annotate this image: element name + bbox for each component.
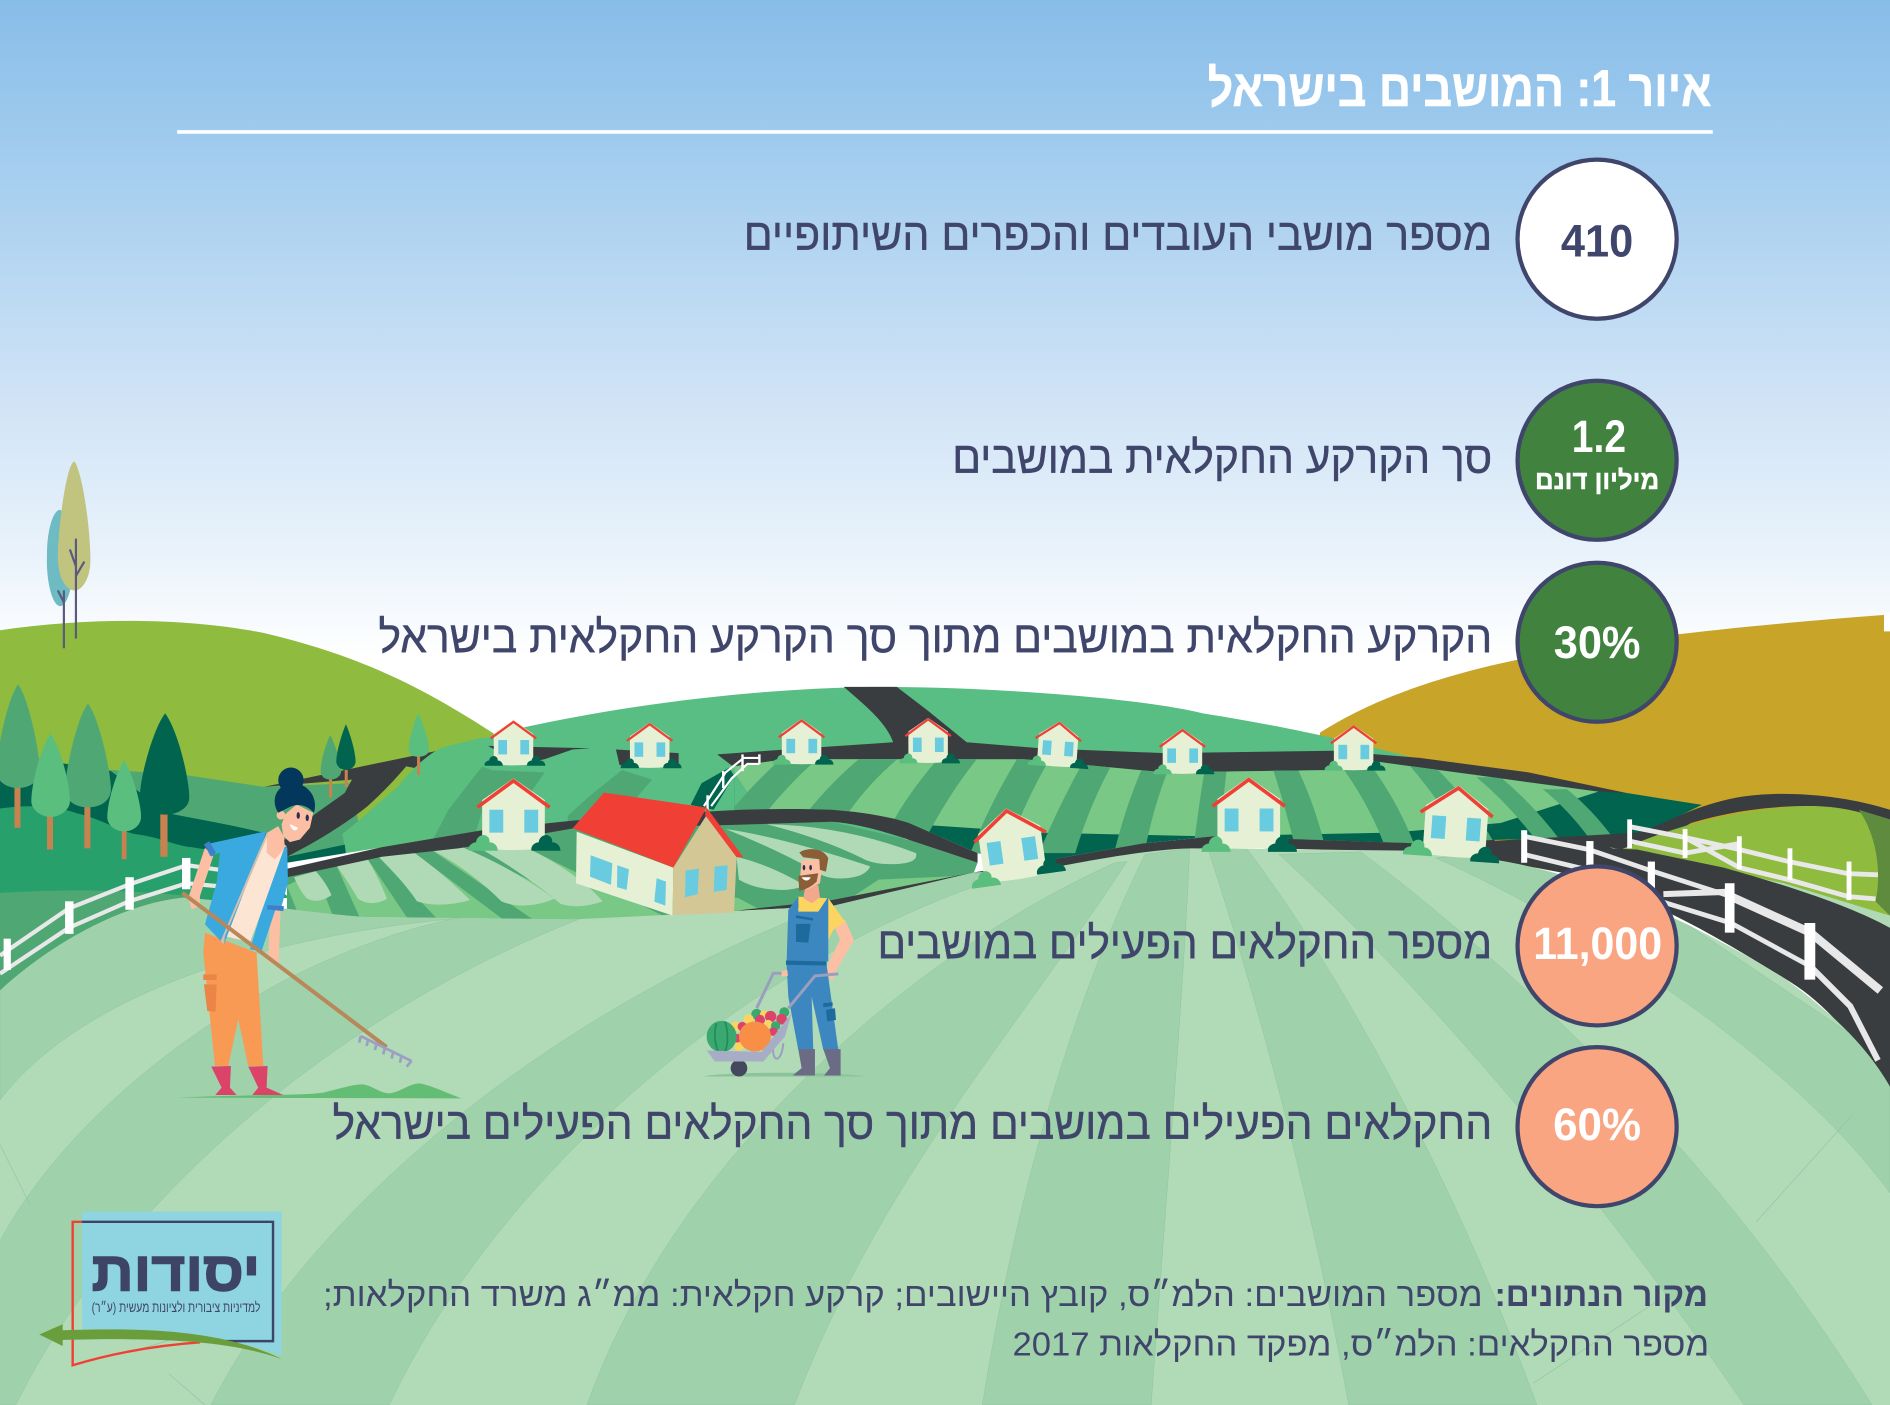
man with wheelbarrow (703, 849, 865, 1076)
logo: Yesodot: יסודות (92, 1241, 260, 1303)
stat row: 30% (378, 563, 1677, 722)
right ribbon road (1490, 794, 1890, 859)
houses (469, 718, 1504, 916)
data source note (323, 1276, 1709, 1364)
stat row: 410 (744, 160, 1677, 319)
right road (1490, 843, 1890, 1103)
stat row: 11,000: מספר החקלאים הפעילים במושבים (878, 919, 1492, 968)
logo: Yesodot (39, 1212, 282, 1365)
lower-left striped field (286, 822, 978, 920)
wheelbarrow (707, 973, 838, 1076)
left side of centre hill (342, 737, 482, 853)
ground shadow (703, 1073, 865, 1076)
upper road with branch (488, 687, 1626, 795)
data source note: מקור הנתונים: (1495, 1276, 1708, 1314)
large farmhouse (573, 793, 743, 916)
light strip below right hill (1609, 847, 1890, 930)
data source note: מספר המושבים: הלמ״ס, קובץ היישובים; קרקע חקלאית: ממ״ג משרד החקלאות; (323, 1276, 1483, 1314)
row of trees (0, 684, 429, 859)
stat row: 30%: הקרקע החקלאית במושבים מתוך סך הקרקע החקלאית בישראל (378, 613, 1492, 662)
stat row: 30%: 30% (1554, 617, 1640, 668)
house row back (485, 718, 1386, 774)
stat row: 1.2 million dunam: 1.2 (1572, 411, 1626, 462)
stat row: 60% (333, 1047, 1677, 1206)
title text: איור 1: המושבים בישראל (1208, 59, 1712, 117)
grass mound (178, 1083, 462, 1098)
far-left road (264, 749, 444, 857)
stat row: 60%: החקלאים הפעילים במושבים מתוך סך החקלאים הפעילים בישראל (333, 1100, 1492, 1149)
centre hill (444, 687, 1431, 856)
far-left hills (0, 753, 362, 1000)
middle striped field (734, 759, 1702, 860)
lower road (733, 836, 1495, 911)
landscape illustration (0, 462, 1890, 1405)
middle road (287, 809, 978, 877)
stat row: 1.2 million dunam: מיליון דונם (1535, 465, 1659, 495)
right far fence (1627, 819, 1878, 900)
right near fence (1521, 830, 1880, 1060)
house row front (469, 777, 1504, 889)
data source note: מספר החקלאים: הלמ״ס, מפקד החקלאות 2017 (1012, 1326, 1709, 1364)
stat row: 60%: 60% (1553, 1099, 1641, 1150)
right edge sliver (1884, 612, 1890, 631)
small centre fence (704, 754, 759, 810)
mustard hill (1320, 615, 1890, 868)
stat row: 11,000 (878, 866, 1677, 1025)
stat row: 410: 410 (1561, 216, 1633, 267)
dark patch under road (287, 845, 346, 863)
right hill edge (1859, 810, 1890, 916)
stat row: 1.2 million dunam (952, 381, 1677, 540)
woman with rake (178, 767, 462, 1098)
patch behind small fence (691, 768, 734, 810)
left fence (0, 858, 229, 974)
olive left hill (0, 621, 506, 843)
stat row: 11,000: 11,000 (1533, 918, 1662, 969)
right olive hill (1621, 806, 1890, 916)
stat row: 1.2 million dunam: סך הקרקע החקלאית במושבים (952, 433, 1492, 482)
logo: Yesodot: למדיניות ציבורית ולציונות מעשית (ע״ר) (92, 1299, 260, 1315)
title rule (177, 130, 1713, 134)
rake (182, 893, 412, 1067)
hill shadows (450, 770, 652, 841)
sky background (0, 0, 1890, 657)
stat row: 410: מספר מושבי העובדים והכפרים השיתופיים (744, 210, 1492, 259)
chart title (177, 59, 1713, 134)
foreground striped field (0, 831, 1890, 1405)
tall trees (47, 462, 90, 648)
